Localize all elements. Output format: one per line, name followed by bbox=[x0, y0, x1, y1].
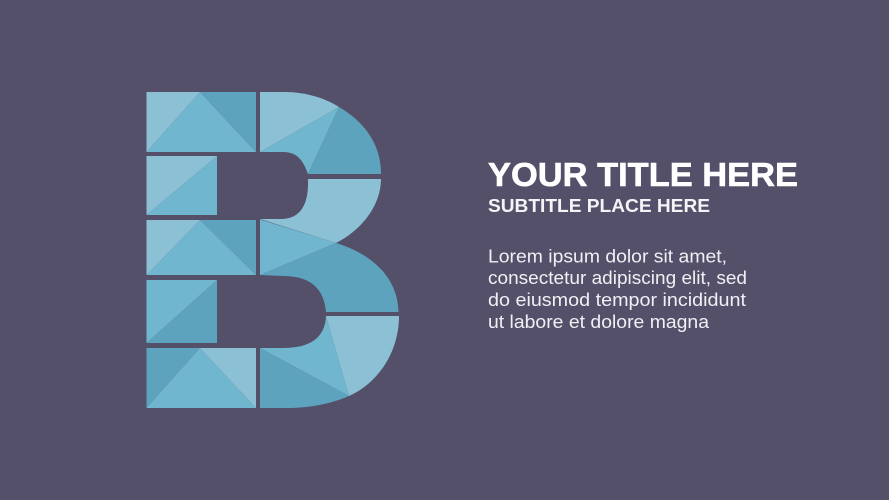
lower bowl segment bbox=[260, 316, 399, 408]
body text bbox=[488, 246, 747, 332]
body text: do eiusmod tempor incididunt bbox=[488, 290, 746, 310]
left column block 3 bbox=[146, 220, 256, 275]
upper bowl lower segment bbox=[260, 179, 381, 243]
title: YOUR TITLE HERE bbox=[488, 156, 798, 193]
body text: Lorem ipsum dolor sit amet, bbox=[488, 246, 727, 266]
body text: ut labore et dolore magna bbox=[488, 312, 710, 332]
middle segment bbox=[260, 220, 398, 312]
left column block 1 bbox=[146, 92, 256, 152]
subtitle: SUBTITLE PLACE HERE bbox=[488, 196, 710, 216]
upper bowl top segment bbox=[260, 92, 381, 174]
body text: consectetur adipiscing elit, sed bbox=[488, 268, 747, 288]
letter B graphic bbox=[146, 92, 399, 408]
left column block 4 bbox=[146, 280, 217, 343]
left column block 2 bbox=[146, 156, 217, 215]
left column block 5 bbox=[146, 348, 256, 408]
